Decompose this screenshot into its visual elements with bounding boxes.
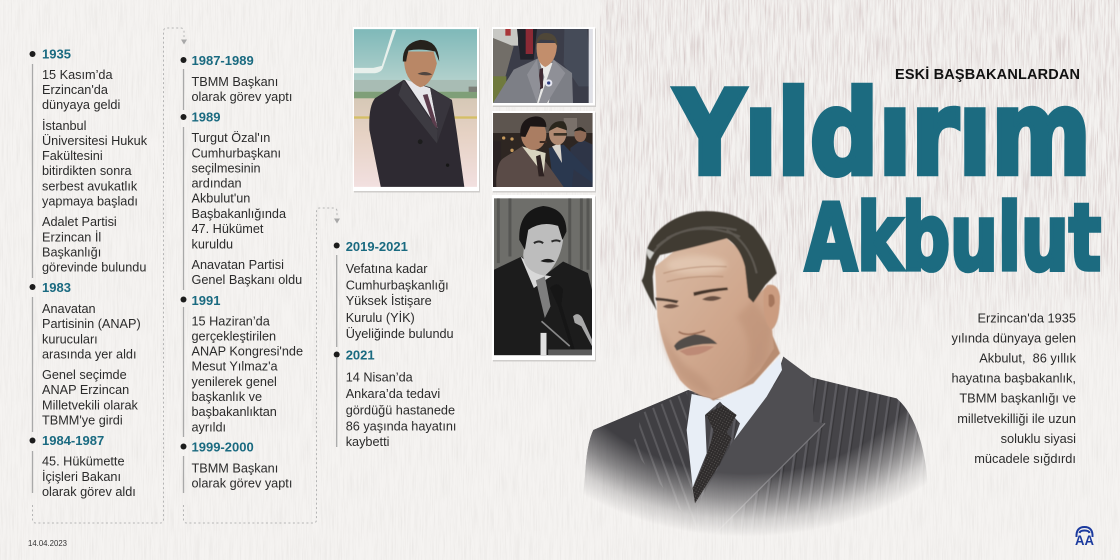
entry 1935: 15 Kasım’da: [42, 68, 113, 82]
timeline column 1: [30, 28, 187, 523]
entry 2019-2021: Kurulu (YİK): [346, 311, 415, 325]
entry 1989: Cumhurbaşkanı: [192, 146, 281, 160]
worn texture behind title area: [600, 0, 1120, 360]
entry 2021: 2021: [346, 348, 375, 362]
entry 1989: [180, 110, 302, 290]
entry 1991: başbakanlıktan: [192, 405, 277, 419]
entry 1999-2000: olarak görev yaptı: [192, 476, 292, 490]
entry 1991: ayrıldı: [192, 420, 226, 434]
entry 1989: Turgut Özal'ın: [192, 131, 270, 145]
summary paragraph: TBMM başkanlığı ve: [959, 390, 1076, 406]
eyes: [663, 304, 679, 309]
entry 1983: TBMM'ye girdi: [42, 414, 123, 428]
entry 1935: Fakültesini: [42, 149, 103, 163]
entry 1991: 15 Haziran’da: [192, 314, 271, 328]
entry 1935: Erzincan'da: [42, 83, 109, 97]
neck shadow: [687, 333, 780, 401]
timeline column 3: [334, 239, 456, 449]
entry 2021: gördüğü hastanede: [346, 404, 455, 418]
entry 1984-1987: 45. Hükümette: [42, 454, 125, 468]
entry 1989: 47. Hükümet: [192, 222, 264, 236]
tie: [693, 405, 737, 503]
face shading: [660, 256, 772, 395]
summary paragraph: Akbulut, 86 yıllık: [979, 350, 1077, 366]
entry 2021: 86 yaşında hayatını: [346, 420, 456, 434]
entry 1935: 1935: [42, 46, 71, 62]
entry 1987-1989: [180, 53, 292, 110]
summary paragraph: milletvekilliği ile uzun: [957, 411, 1076, 426]
arrowhead: [334, 218, 340, 224]
entry 2019-2021: [334, 239, 454, 347]
entry 1983: Partisinin (ANAP): [42, 317, 141, 331]
entry 1984-1987: İçişleri Bakanı: [42, 470, 121, 484]
date: 14.04.2023: [28, 539, 67, 548]
kicker: Eski Başbakanlardan: ESKİ BAŞBAKANLARDAN: [895, 66, 1080, 83]
summary paragraph: hayatına başbakanlık,: [951, 370, 1076, 386]
entry 1935: İstanbul: [42, 119, 86, 133]
summary paragraph: mücadele sığdırdı: [974, 451, 1076, 466]
forehead wrinkles: [663, 266, 727, 282]
shirt: [687, 357, 782, 487]
portrait cut-out: [584, 210, 927, 533]
entry 2019-2021: Cumhurbaşkanlığı: [346, 278, 449, 292]
dashed connector to column 3: [184, 208, 337, 523]
photo: standing at airfield: [353, 27, 480, 192]
entry 1983: [30, 280, 141, 432]
summary paragraph: Erzincan'da 1935: [978, 310, 1076, 326]
entry 1935: [30, 46, 148, 278]
entry 1935: yapmaya başladı: [42, 194, 138, 208]
entry 1935: Adalet Partisi: [42, 215, 117, 229]
photo: black and white at microphones: [492, 195, 596, 362]
entry 1989: 1989: [192, 110, 220, 124]
entry 1991: 1991: [192, 293, 220, 308]
entry 1999-2000: 1999-2000: [192, 440, 254, 454]
entry 2019-2021: 2019-2021: [346, 239, 408, 254]
entry 1991: ANAP Kongresi'nde: [192, 344, 303, 358]
summary paragraph: yılında dünyaya gelen: [951, 330, 1076, 346]
entry 1935: dünyaya geldi: [42, 98, 120, 112]
entry 1983: ANAP Erzincan: [42, 383, 129, 397]
entry 1987-1989: olarak görev yaptı: [192, 90, 292, 104]
hair: [642, 211, 777, 311]
entry 1991: Mesut Yılmaz'a: [192, 360, 279, 374]
entry 1935: görevinde bulundu: [42, 260, 146, 274]
entry 2021: kaybetti: [346, 435, 389, 449]
entry 1984-1987: [30, 433, 136, 499]
entry 1935: serbest avukatlık: [42, 180, 138, 194]
entry 1935: Erzincan İl: [42, 230, 101, 244]
timeline column 2: [180, 53, 340, 523]
title: Yıldırım Akbulut: [673, 66, 1101, 292]
entry 1991: gerçekleştirilen: [192, 330, 276, 344]
entry 1989: Anavatan Partisi: [192, 258, 284, 272]
entry 1999-2000: [180, 440, 292, 493]
entry 1989: ardından: [192, 176, 242, 190]
entry 1989: seçilmesinin: [192, 162, 261, 176]
photo: seated with badge: [492, 27, 596, 107]
entry 2019-2021: Yüksek İstişare: [346, 294, 432, 308]
face: [655, 238, 780, 398]
entry 1935: Üniversitesi Hukuk: [42, 134, 148, 148]
entry 1991: [180, 293, 303, 437]
entry 2019-2021: Vefatına kadar: [346, 262, 428, 276]
summary paragraph: soluklu siyasi: [1001, 431, 1076, 446]
entry 1983: arasında yer aldı: [42, 348, 137, 362]
entry 2021: [334, 348, 456, 449]
entry 1983: Anavatan: [42, 302, 96, 316]
icon: AA agency logo: AA: [1075, 532, 1094, 548]
entry 1991: başkanlık ve: [192, 390, 262, 404]
head: [642, 211, 780, 401]
mouth: [679, 346, 714, 355]
entry 1983: 1983: [42, 280, 71, 295]
arrowhead: [181, 40, 187, 44]
entry 2021: 14 Nisan’da: [346, 370, 414, 384]
entry 1999-2000: TBMM Başkanı: [192, 462, 278, 476]
entry 1983: Milletvekili olarak: [42, 398, 139, 412]
entry 1983: kurucuları: [42, 332, 98, 346]
entry 1987-1989: TBMM Başkanı: [192, 75, 278, 89]
entry 2019-2021: Üyeliğinde bulundu: [346, 327, 454, 341]
entry 1989: kuruldu: [192, 238, 233, 252]
entry 1989: Akbulut'un: [192, 192, 250, 206]
nose: [679, 331, 705, 334]
entry 2021: Ankara’da tedavi: [346, 387, 440, 401]
entry 1983: Genel seçimde: [42, 368, 127, 382]
entry 1935: bitirdikten sonra: [42, 164, 133, 178]
entry 1991: yenilerek genel: [192, 375, 277, 389]
suit jacket: [584, 356, 927, 533]
entry 1989: Başbakanlığında: [192, 207, 287, 221]
eyebrows: [655, 297, 679, 303]
dashed connector to column 2: [32, 28, 184, 523]
entry 1935: Başkanlığı: [42, 246, 101, 260]
ear: [764, 286, 780, 329]
summary paragraph: [951, 310, 1077, 466]
entry 1984-1987: olarak görev aldı: [42, 485, 136, 499]
entry 1984-1987: 1984-1987: [42, 433, 104, 448]
photo: walking with others: [492, 111, 596, 192]
moustache: [674, 334, 717, 351]
entry 1989: Genel Başkanı oldu: [192, 273, 302, 287]
entry 1987-1989: 1987-1989: [192, 53, 254, 68]
